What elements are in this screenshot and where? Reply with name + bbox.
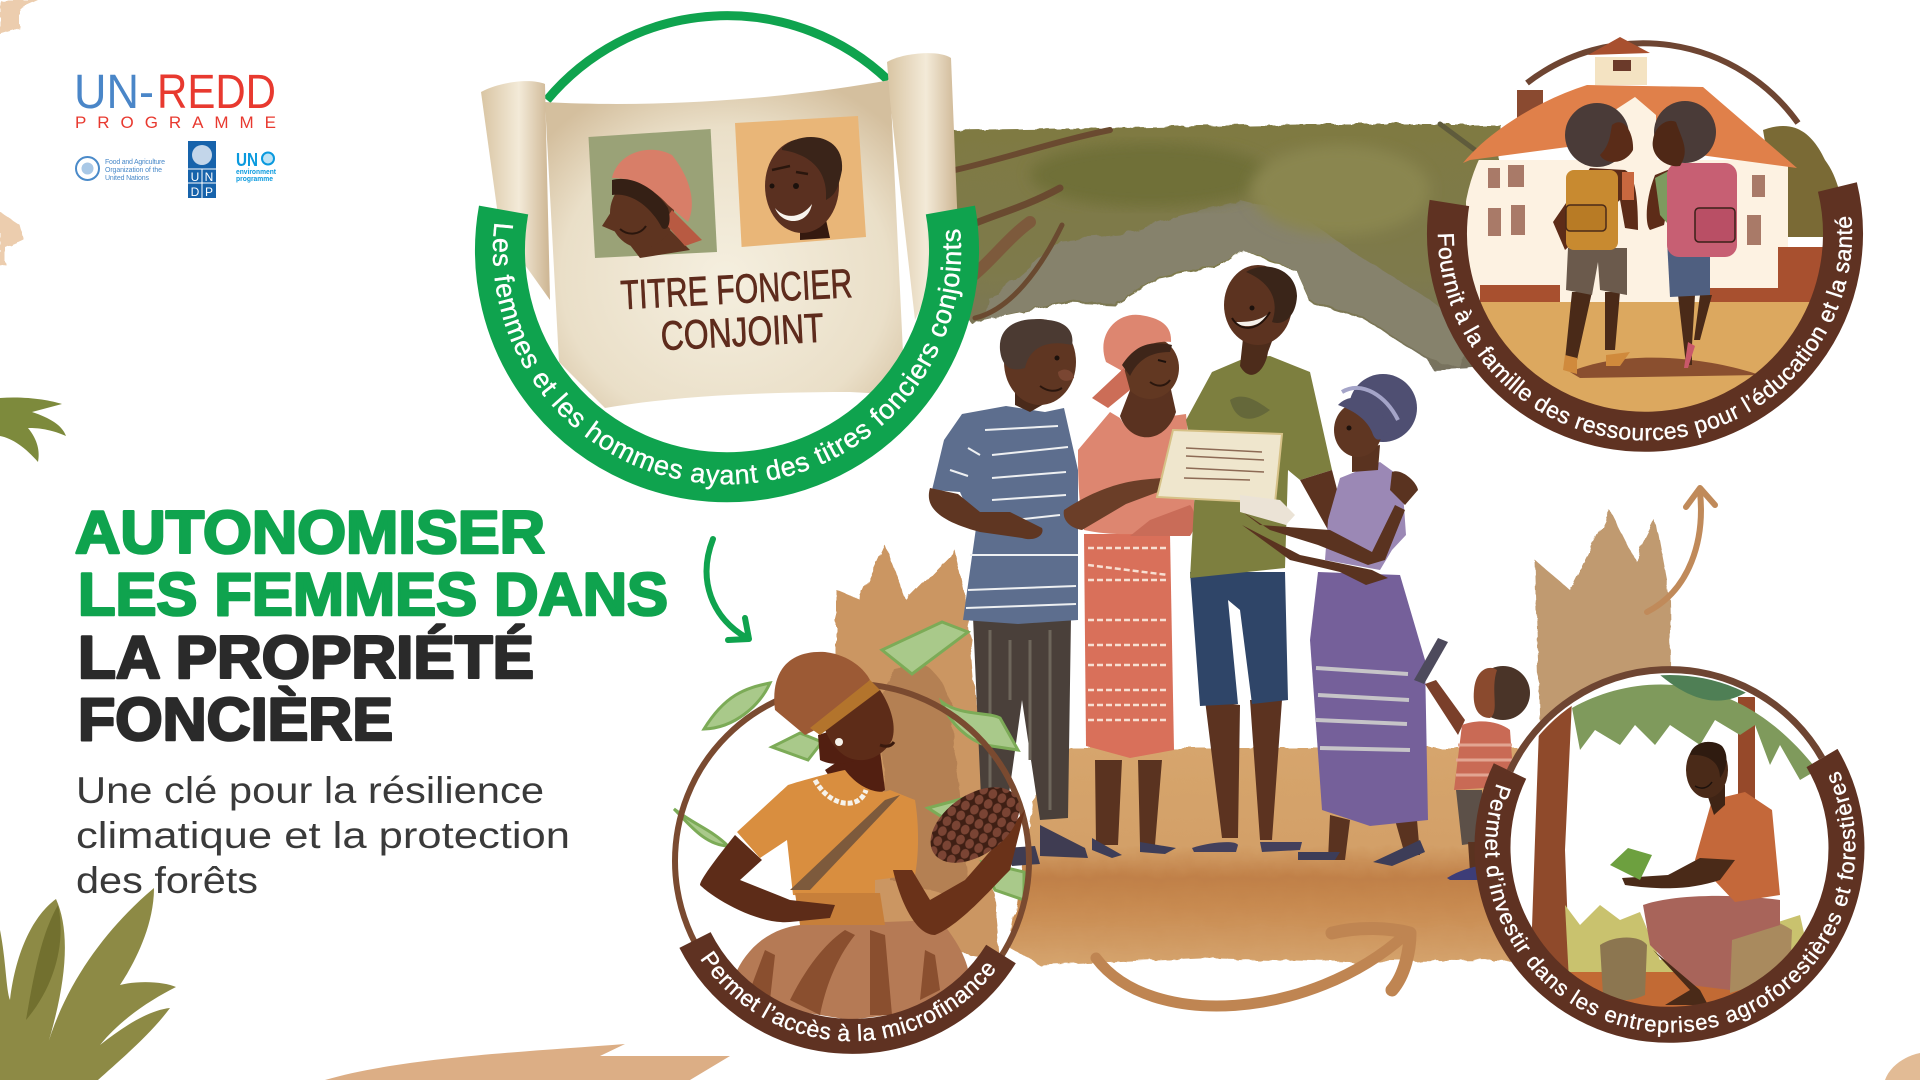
scroll title: CONJOINT <box>660 305 825 359</box>
green top arc <box>547 16 888 100</box>
FAO logo: Food and Agriculture <box>105 159 165 166</box>
brown ribbon <box>1447 187 1843 432</box>
title: FONCIÈRE <box>78 686 393 753</box>
UN environment programme logo: environment <box>236 167 276 176</box>
subtitle: Une clé pour la résilience <box>76 770 544 811</box>
arrows <box>707 488 1715 1006</box>
thin ring <box>675 684 1029 1038</box>
woman with coffee beans <box>700 652 1033 1020</box>
ribbon text: Fournit à la famille des ressources pour l’éducation et la santé <box>1438 216 1852 441</box>
tree beside school <box>1763 126 1843 237</box>
subtitle: climatique et la protection <box>76 815 570 856</box>
UNDP logo: D <box>191 185 200 199</box>
subtitle: des forêts <box>76 860 258 901</box>
scroll title <box>619 260 856 361</box>
circle: joint land title scroll <box>474 11 1008 530</box>
child with pink backpack <box>1647 101 1737 368</box>
scroll title: TITRE FONCIER <box>619 260 853 318</box>
UN-REDD wordmark: REDD <box>157 66 276 119</box>
title document <box>1157 430 1282 503</box>
UNDP logo <box>188 141 216 199</box>
illustration <box>1530 675 1817 1020</box>
portrait: woman <box>588 129 717 258</box>
UN environment programme logo: UN <box>236 150 258 170</box>
green arrow <box>707 539 749 640</box>
branches <box>955 124 1475 318</box>
man in olive shirt <box>1186 265 1345 852</box>
UN-REDD wordmark: UN- <box>74 66 154 119</box>
title: LA PROPRIÉTÉ <box>78 624 534 691</box>
scroll paper <box>545 80 905 408</box>
background: ground <box>1010 748 1540 965</box>
circle: microfinance <box>672 620 1032 1054</box>
portrait: man <box>735 116 866 247</box>
background: tree canopy <box>950 124 1500 372</box>
title <box>75 499 668 753</box>
FAO logo: Organization of the <box>105 167 162 174</box>
woman in purple <box>1240 374 1428 866</box>
subtitle <box>76 770 570 901</box>
family <box>929 265 1530 880</box>
background: bushes <box>836 510 1672 960</box>
UN environment programme logo <box>236 150 276 183</box>
man with striped shirt <box>929 319 1088 866</box>
scroll rollers <box>481 81 550 300</box>
circle: school resources <box>1427 37 1864 452</box>
ribbon text: Permet d’investir dans les entreprises agroforestières et forestières <box>1485 772 1856 1037</box>
child with phone <box>1414 638 1530 880</box>
programme label: PROGRAMME <box>75 113 276 132</box>
ribbon text: Permet l’accès à la microfinance <box>700 950 995 1042</box>
green ribbon <box>500 210 954 477</box>
UNDP logo: N <box>205 170 213 184</box>
ribbon text: Les femmes et les hommes ayant des titres fonciers conjoints <box>492 224 963 490</box>
school building and ground <box>1463 37 1822 412</box>
child with yellow backpack <box>1553 103 1638 374</box>
brown ribbon <box>695 940 1001 1036</box>
FAO logo: United Nations <box>105 175 150 182</box>
white interior <box>1494 671 1846 1023</box>
UNDP logo: P <box>205 185 213 199</box>
brown ribbon <box>1492 758 1846 1025</box>
banknotes <box>674 622 1024 900</box>
UNDP logo: U <box>191 170 199 184</box>
thin ring <box>1527 43 1798 123</box>
UN-REDD wordmark <box>74 66 276 119</box>
woman in pink with headwrap <box>1064 315 1196 858</box>
tan arrow to investing <box>1096 928 1410 1006</box>
title: LES FEMMES DANS <box>78 561 668 628</box>
logos <box>74 66 276 199</box>
FAO logo <box>76 157 165 182</box>
circle: agroforestry investment <box>1474 666 1864 1043</box>
title: AUTONOMISER <box>75 499 545 566</box>
thin ring <box>1510 670 1822 771</box>
tan arrow to school <box>1647 488 1715 612</box>
UN environment programme logo: programme <box>236 174 273 183</box>
